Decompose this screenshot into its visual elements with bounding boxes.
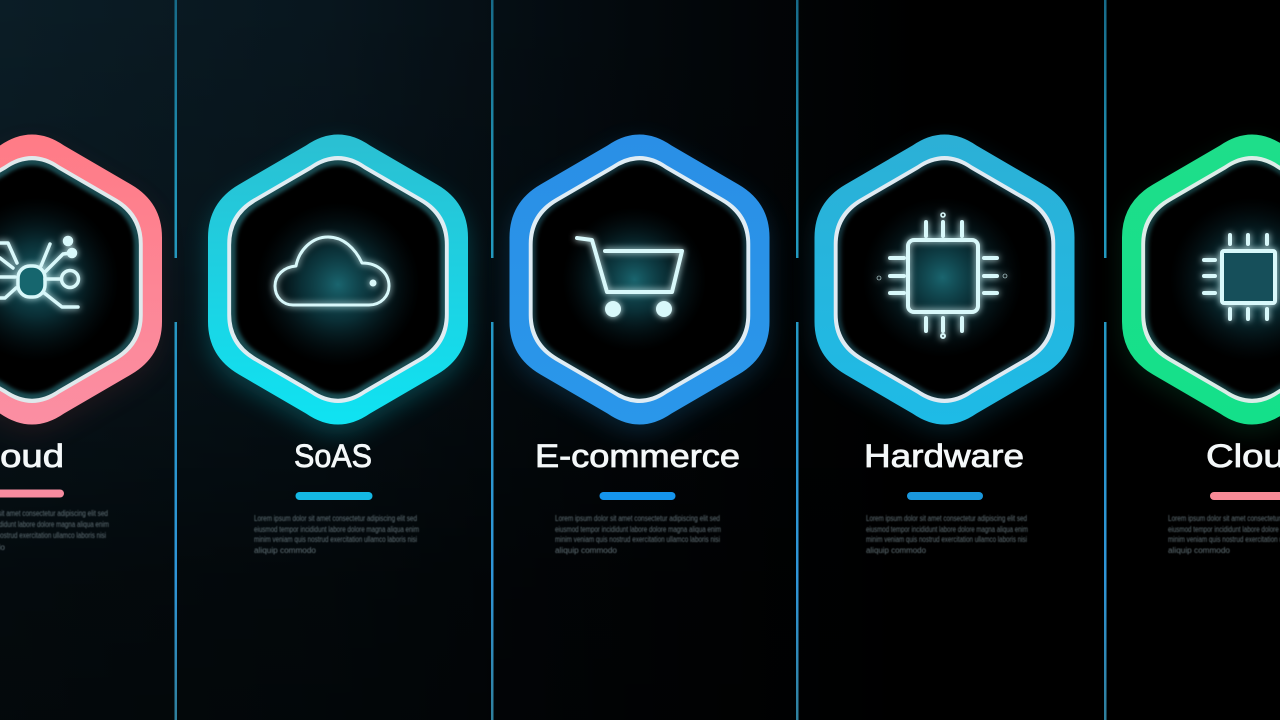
accent bar: pink bbox=[1210, 492, 1280, 500]
description text: Lorem ipsum dolor sit amet consectetur adipiscing elit sed bbox=[254, 514, 417, 523]
description text: minim veniam quis nostrud exercitation ullamco laboris nisi bbox=[555, 535, 720, 544]
description text bbox=[254, 514, 419, 555]
heading: Hardware: Hardware bbox=[864, 438, 1024, 474]
description text: Lorem ipsum dolor sit amet consectetur adipiscing elit sed bbox=[866, 514, 1027, 523]
icon: small chip bbox=[1204, 235, 1275, 319]
icon: cloud bbox=[275, 237, 389, 305]
description text: Lorem ipsum dolor sit amet consectetur adipiscing elit sed bbox=[555, 514, 720, 523]
description text: minim veniam quis nostrud exercitation ullamco laboris nisi bbox=[866, 535, 1027, 544]
hexagon badge: sky blue bbox=[814, 134, 1074, 432]
panel: E-commerce bbox=[510, 134, 770, 555]
description text bbox=[555, 514, 721, 555]
description text: eiusmod tempor incididunt labore dolore magna aliqua enim bbox=[866, 525, 1028, 534]
description text bbox=[1168, 514, 1280, 555]
hexagon badge: teal bbox=[208, 134, 468, 434]
description text: aliquip commodo bbox=[555, 546, 618, 555]
accent bar: blue bbox=[907, 492, 983, 500]
description text: aliquip commodo bbox=[1168, 546, 1231, 555]
panel: Hardware bbox=[814, 134, 1074, 555]
description text: minim veniam quis nostrud exercitation ullamco laboris nisi bbox=[254, 535, 417, 544]
column divider 3 bbox=[796, 0, 798, 720]
icon: processor chip bbox=[879, 214, 1005, 337]
panel: Cloud (right, cropped) bbox=[1122, 134, 1280, 555]
column divider 1 bbox=[174, 0, 177, 720]
panel: cloud AI (left, cropped) bbox=[0, 134, 162, 552]
description text: eiusmod tempor incididunt labore dolore magna aliqua enim bbox=[254, 525, 419, 534]
hexagon badge: green bbox=[1122, 134, 1280, 432]
heading: SoAS: SoAS bbox=[294, 438, 372, 474]
accent bar: blue bbox=[600, 492, 676, 500]
icon: shopping cart bbox=[577, 238, 682, 317]
hexagon badge: blue bbox=[510, 134, 770, 432]
panel: SaaS bbox=[208, 134, 468, 555]
description text: aliquip commodo bbox=[254, 546, 317, 555]
column divider 2 bbox=[491, 0, 494, 720]
accent bar: cyan bbox=[296, 492, 372, 500]
icon: neural circuit bbox=[0, 238, 78, 307]
column divider 4 bbox=[1104, 0, 1106, 720]
hexagon badge: pink bbox=[0, 134, 162, 434]
accent bar: pink bbox=[0, 490, 64, 498]
description text: aliquip commodo bbox=[866, 546, 927, 555]
description text: eiusmod tempor incididunt labore dolore magna aliqua enim bbox=[555, 525, 721, 534]
description text bbox=[866, 514, 1028, 555]
description text bbox=[0, 509, 109, 552]
heading: E-commerce: E-commerce bbox=[535, 438, 740, 474]
